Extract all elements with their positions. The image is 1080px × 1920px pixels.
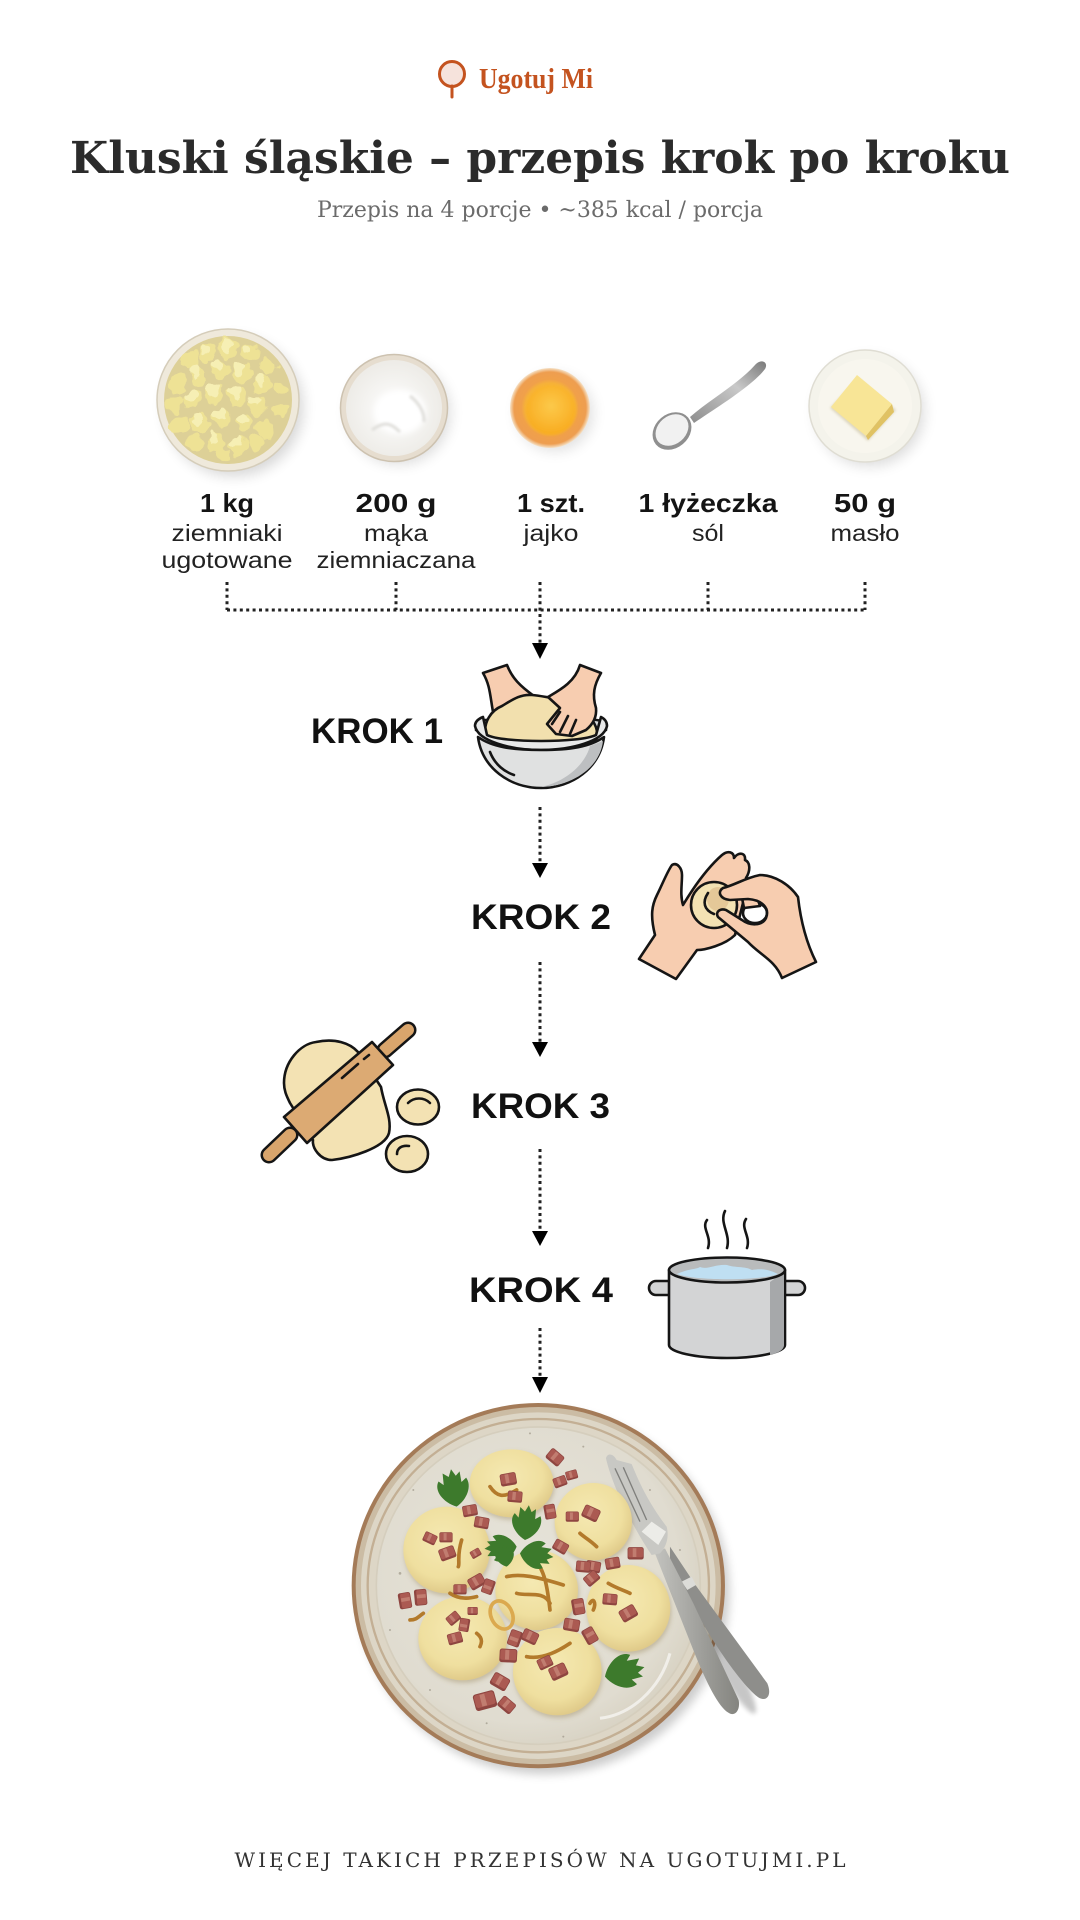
icon: egg (510, 368, 593, 451)
label: butter: masło (830, 520, 900, 546)
label: flour (316, 488, 476, 573)
arrow: step 1 to 2 (532, 807, 548, 878)
label: egg: jajko (522, 520, 578, 546)
fried onions (410, 1487, 630, 1657)
label: salt: 1 łyżeczka (638, 488, 778, 518)
label: flour: 200 g (356, 488, 436, 518)
heading: krok 2: KROK 2 (471, 898, 611, 937)
step 4 (469, 1211, 805, 1358)
bacon bits (397, 1447, 644, 1715)
icon: pot of boiling water (649, 1211, 805, 1358)
icon: spoon of salt (645, 361, 766, 458)
brand name: Ugotuj Mi (479, 64, 593, 95)
logo (440, 62, 593, 97)
label: potatoes (162, 488, 292, 573)
knife and fork (606, 1454, 769, 1719)
label: potatoes: ziemniaki (172, 520, 282, 546)
label: potatoes: ugotowane (162, 547, 292, 573)
photo: plate of kluski with bacon and parsley (352, 1403, 769, 1774)
label: egg (517, 488, 585, 546)
label: butter: 50 g (834, 488, 896, 518)
title: Kluski śląskie – przepis krok po kroku (70, 133, 1010, 184)
parsley (435, 1467, 649, 1693)
label: potatoes: 1 kg (200, 488, 254, 518)
arrow: step 2 to 3 (532, 962, 548, 1057)
dumplings (403, 1449, 670, 1715)
panel: ingredients (157, 329, 924, 573)
heading: krok 3: KROK 3 (471, 1087, 610, 1126)
label: salt (638, 488, 778, 546)
step 3 (269, 1030, 610, 1172)
icon: bowl of potatoes (157, 329, 303, 476)
arrow: ingredients connector (227, 582, 865, 659)
subtitle: Przepis na 4 porcje • ~385 kcal / porcja (317, 198, 763, 223)
icon: rolling pin and dough (269, 1030, 439, 1172)
icon: spoon (440, 62, 464, 97)
label: salt: sól (692, 520, 724, 546)
icon: kneading dough in a bowl (475, 665, 607, 788)
label: butter (830, 488, 900, 546)
icon: butter on a plate (809, 350, 924, 466)
label: egg: 1 szt. (517, 488, 585, 518)
heading: krok 4: KROK 4 (469, 1271, 614, 1310)
step 2 (471, 852, 816, 979)
label: flour: ziemniaczana (316, 547, 476, 573)
icon: bowl of flour (340, 354, 450, 464)
heading: krok 1: KROK 1 (311, 712, 443, 751)
arrow: step 4 to plate (532, 1328, 548, 1393)
icon: hands shaping dough (639, 852, 816, 979)
step 1 (311, 665, 607, 788)
label: flour: mąka (364, 520, 428, 546)
footer: WIĘCEJ TAKICH PRZEPISÓW NA UGOTUJMI.PL (234, 1847, 846, 1872)
arrow: step 3 to 4 (532, 1149, 548, 1246)
